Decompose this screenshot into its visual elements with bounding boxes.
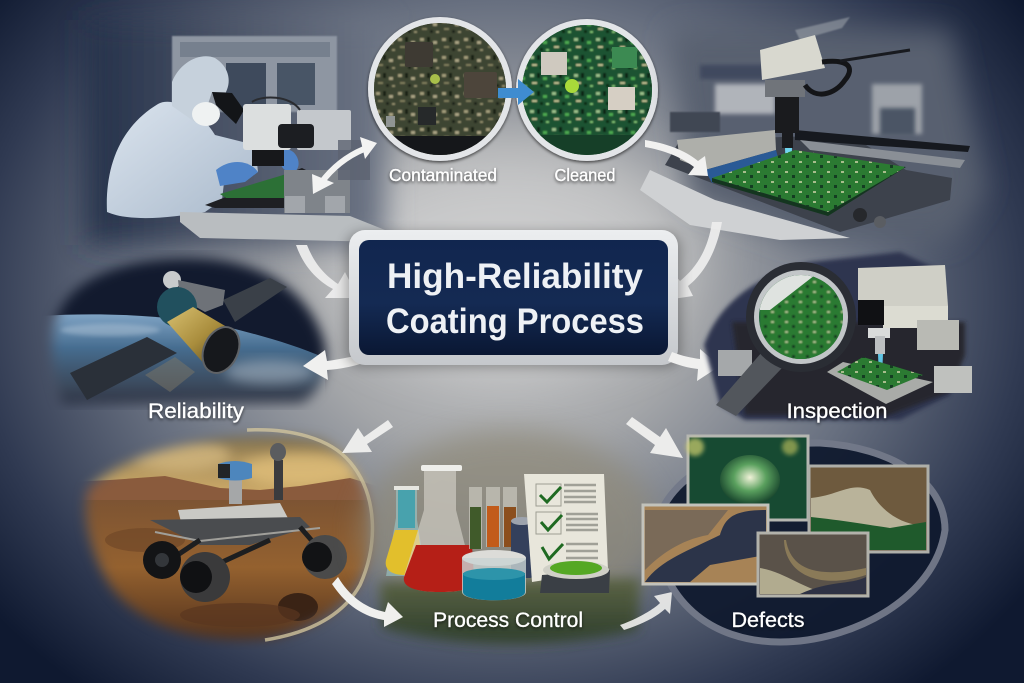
inspected board on tray (827, 357, 933, 404)
window frame (172, 36, 337, 112)
icon: satellite (70, 271, 287, 400)
checklist document (524, 474, 608, 582)
technician in white suit (107, 56, 302, 218)
icon: double-headed curved arrow (312, 137, 377, 194)
blue dish (462, 550, 526, 600)
label: inspection: Inspection (786, 400, 888, 423)
panel: rover on planet surface (79, 428, 377, 646)
arrow: title to inspection (668, 349, 720, 381)
label: process control: Process Control (433, 609, 583, 632)
icon: rover (143, 443, 347, 602)
face mask (192, 102, 220, 126)
icon: blue arrow between lenses (498, 79, 534, 105)
small flask (386, 486, 426, 576)
arrow: title to reliability (303, 350, 360, 380)
machine housing (858, 265, 959, 378)
label: cleaned: Cleaned (554, 165, 616, 185)
title: High-Reliability (387, 257, 644, 296)
panel: cleanroom technician at microscope (85, 20, 385, 245)
title box (346, 230, 681, 367)
arrow: process control to defects (620, 592, 672, 630)
arrow: title to defects (626, 417, 683, 458)
green table (380, 578, 640, 644)
delamination micrograph (758, 533, 868, 596)
label: reliability: Reliability (148, 400, 245, 423)
test tubes (469, 487, 533, 578)
microscope (243, 97, 351, 166)
label: contaminated: Contaminated (389, 165, 497, 185)
dispense head (760, 17, 910, 195)
label: defects: Defects (732, 609, 804, 632)
icon: magnifying glass (716, 262, 856, 416)
green circuit board (712, 150, 906, 228)
arrow: lab into title (296, 245, 358, 298)
bench with green board (180, 140, 385, 242)
arrow: rover to process control (332, 577, 403, 627)
gloves (216, 162, 258, 186)
subtitle: Coating Process (386, 302, 644, 341)
arrow: machine into title (666, 222, 722, 300)
goggles and eyepiece (212, 92, 244, 124)
contaminated board lens (368, 17, 512, 161)
cleaned board lens (515, 19, 660, 161)
arrow: title to rover (342, 420, 393, 453)
panel: coating dispense machine (640, 17, 985, 240)
arrow: lens to dispense machine (645, 140, 708, 176)
machine bed (640, 170, 850, 240)
dark crevice micrograph (643, 505, 768, 584)
panel: inspection (704, 252, 972, 423)
panel: process control (362, 430, 658, 644)
conical flask (404, 465, 474, 592)
coating edge micrograph (809, 466, 928, 552)
panel: contaminated and cleaned circles (368, 17, 660, 185)
panel: defects (643, 436, 945, 642)
green circuit micrograph (686, 436, 808, 520)
panel: satellite reliability (40, 250, 340, 423)
grey blocks (934, 366, 972, 393)
green button device (540, 561, 610, 593)
rim arc (247, 430, 372, 640)
